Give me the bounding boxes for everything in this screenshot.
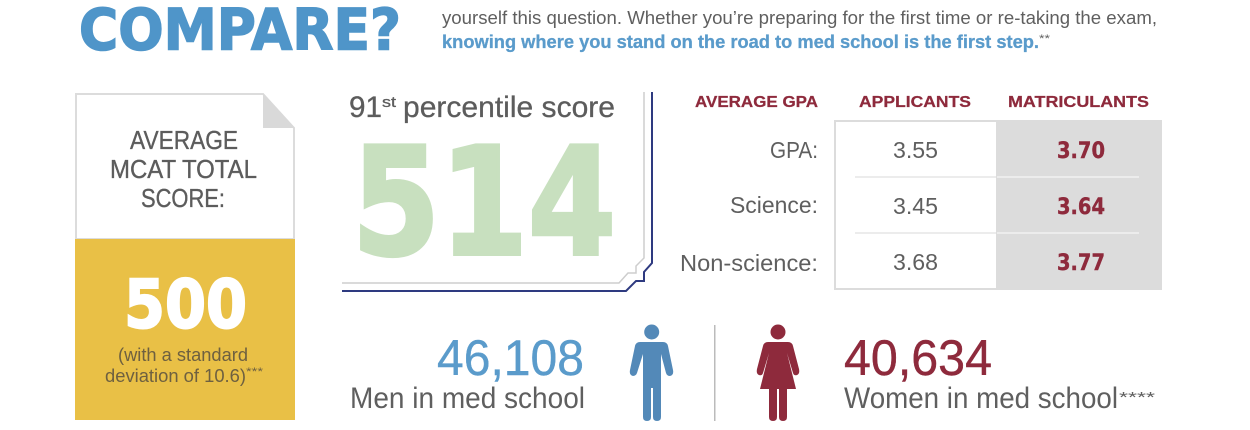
panel heading: MCAT TOTAL bbox=[110, 154, 257, 184]
women statistic: Women in med school bbox=[844, 382, 1118, 415]
divider bbox=[714, 325, 716, 421]
row labels: Non-science: bbox=[680, 250, 818, 276]
standard deviation note: *** bbox=[246, 366, 264, 378]
standard deviation note bbox=[105, 344, 264, 386]
women statistic: 40,634 bbox=[844, 330, 992, 386]
panel heading: AVERAGE bbox=[130, 125, 238, 155]
matriculant values: 3.70 bbox=[1057, 139, 1105, 164]
standard deviation note: deviation of 10.6) bbox=[105, 365, 246, 386]
matriculant values: 3.77 bbox=[1057, 251, 1105, 276]
table body bbox=[835, 121, 1161, 289]
percentile heading: st bbox=[382, 94, 397, 111]
matriculant values: 3.64 bbox=[1057, 195, 1105, 220]
yellow score block bbox=[75, 239, 295, 420]
applicant values: 3.68 bbox=[893, 249, 938, 275]
applicant values: 3.45 bbox=[893, 193, 938, 219]
icon: man bbox=[630, 324, 673, 421]
row labels: Science: bbox=[730, 192, 818, 218]
table headers: APPLICANTS bbox=[859, 94, 971, 111]
icon: woman bbox=[757, 324, 799, 421]
panel heading bbox=[110, 125, 257, 213]
intro text: yourself this question. Whether you’re preparing for the first time or re-taking the exam, bbox=[442, 7, 1157, 28]
row labels: GPA: bbox=[770, 137, 818, 163]
table headers bbox=[695, 94, 1149, 111]
women statistic: **** bbox=[1119, 389, 1155, 406]
men statistic: 46,108 bbox=[437, 330, 584, 386]
table headers: AVERAGE GPA bbox=[695, 94, 818, 111]
intro text: ** bbox=[1039, 33, 1051, 45]
applicant values bbox=[893, 137, 938, 275]
panel heading: SCORE: bbox=[141, 183, 225, 213]
panel: 91st percentile score bbox=[342, 91, 652, 291]
score 500: 500 bbox=[124, 266, 247, 344]
intro text: knowing where you stand on the road to med school is the first step. bbox=[442, 31, 1039, 52]
row labels bbox=[680, 137, 818, 276]
icon: folded page corner bbox=[263, 93, 295, 128]
table headers: MATRICULANTS bbox=[1008, 94, 1149, 111]
intro text bbox=[442, 7, 1157, 52]
men statistic: Men in med school bbox=[350, 382, 585, 415]
applicant values: 3.55 bbox=[893, 137, 938, 163]
women statistic bbox=[844, 330, 1155, 415]
panel: average GPA table bbox=[680, 94, 1162, 290]
panel: average MCAT score document bbox=[75, 93, 295, 420]
score 514: 514 bbox=[352, 117, 616, 290]
matriculant values bbox=[1057, 139, 1105, 276]
frame bbox=[342, 92, 644, 283]
percentile heading: percentile score bbox=[403, 91, 615, 124]
percentile heading: 91 bbox=[349, 91, 382, 124]
men statistic bbox=[350, 330, 585, 415]
standard deviation note: (with a standard bbox=[118, 344, 248, 365]
